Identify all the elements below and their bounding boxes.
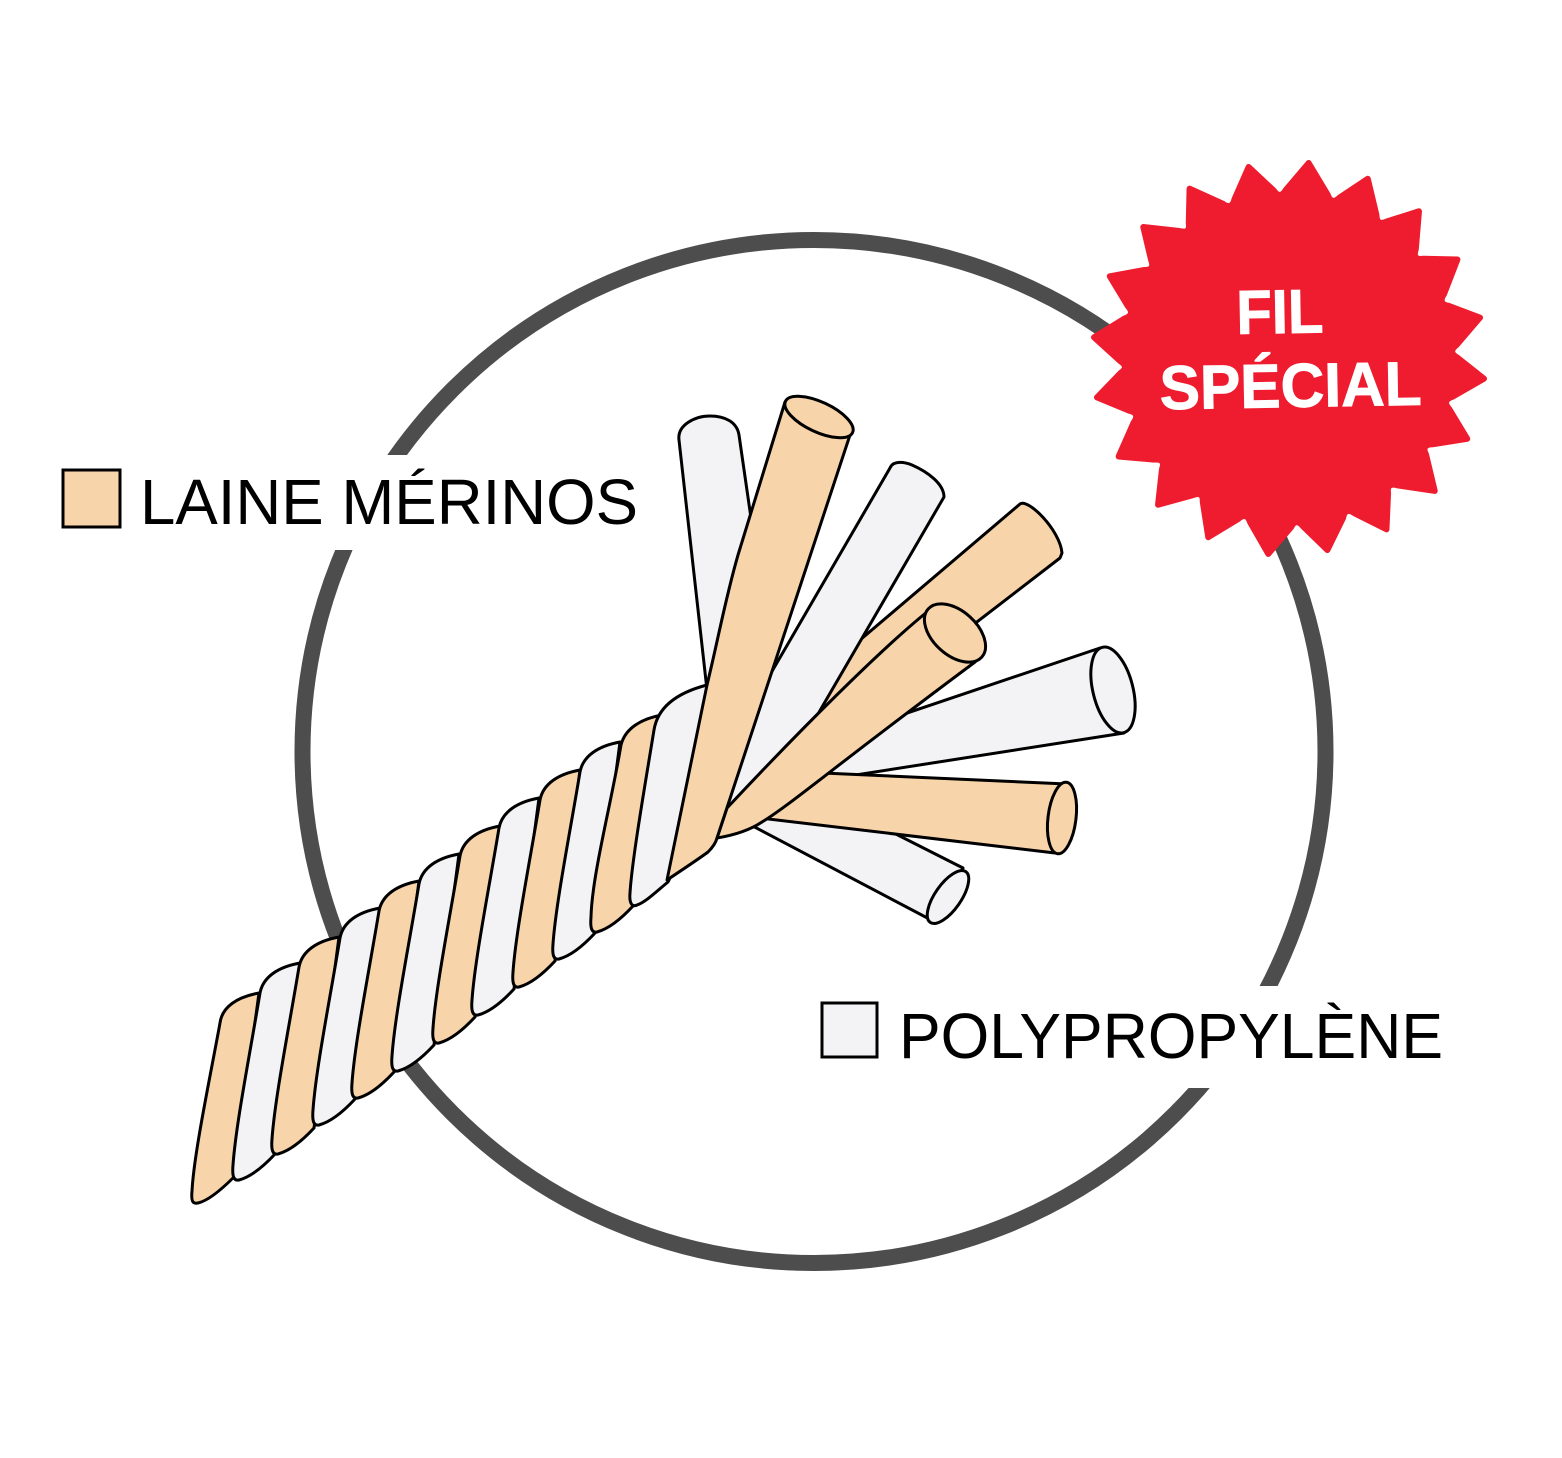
label: merino: LAINE MÉRINOS <box>140 466 638 538</box>
badge text: SPÉCIAL <box>1159 350 1422 423</box>
swatch: polypropylene <box>822 1003 877 1057</box>
strand: tan front strand <box>717 593 996 838</box>
yarn illustration <box>192 388 1143 1203</box>
strand: white upper strand <box>722 462 944 812</box>
legend: polypropylène <box>815 986 1450 1088</box>
strand: tan tall strand <box>667 388 859 880</box>
starburst <box>1094 163 1484 554</box>
strand: white right strand <box>830 642 1143 779</box>
badge text <box>1158 276 1422 423</box>
strand: twisted rope body <box>192 685 720 1203</box>
strand: white back strand <box>679 416 752 690</box>
badge text: FIL <box>1236 277 1324 348</box>
strand: tan back strand <box>815 503 1062 720</box>
swatch: merino <box>63 470 120 527</box>
label: polypropylene: POLYPROPYLÈNE <box>899 1000 1443 1072</box>
legend: laine mérinos <box>55 455 645 550</box>
ring <box>302 240 1326 1263</box>
strand: white lower strand <box>745 800 976 930</box>
strand: tan right strand <box>760 772 1080 855</box>
badge: fil spécial <box>1094 163 1484 554</box>
